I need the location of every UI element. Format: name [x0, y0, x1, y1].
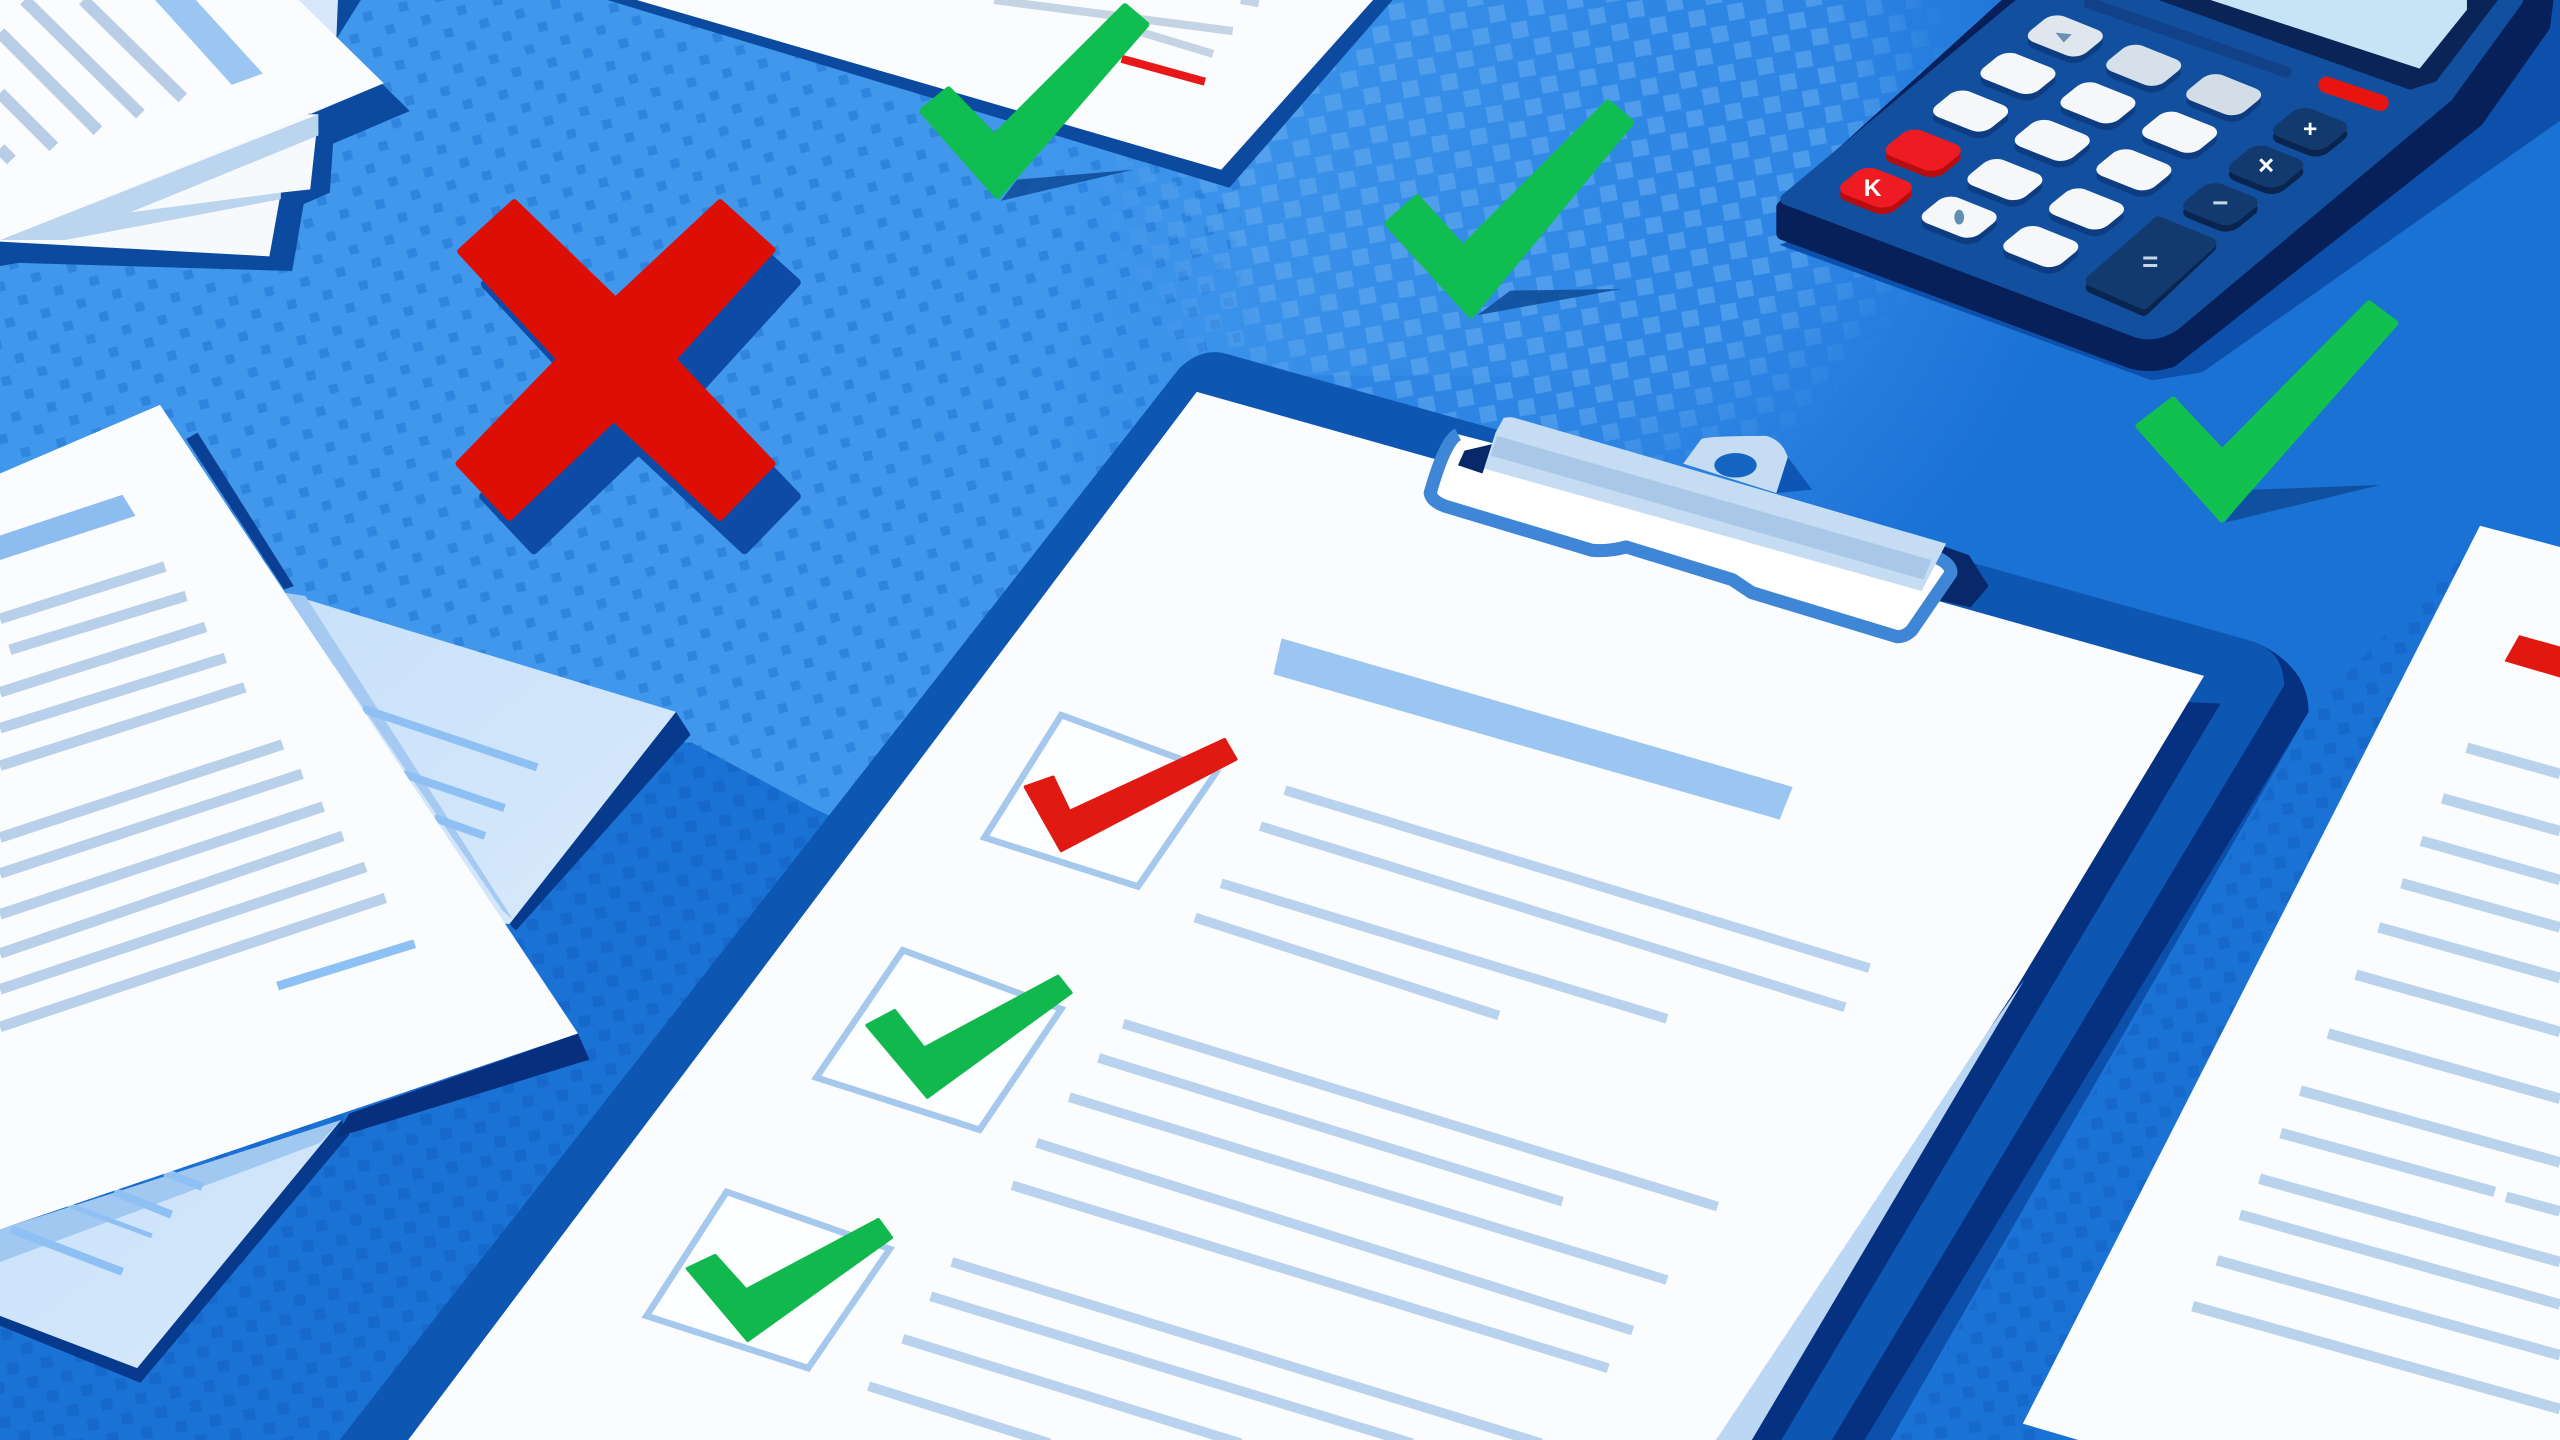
key shadows: [1916, 19, 2267, 277]
calculator: =: [2142, 246, 2158, 277]
checkbox one with red tick: [984, 715, 1236, 887]
red cross: [459, 202, 797, 550]
red line: [1122, 59, 1205, 82]
translucent band: [284, 593, 513, 919]
heading bar: [0, 495, 136, 560]
slot: [2090, 3, 2286, 72]
calculator shadow: [1780, 0, 2560, 380]
accent line: [278, 944, 415, 986]
heading bar: [155, 0, 263, 85]
paper: [408, 392, 2204, 1440]
translucent band: [0, 1120, 341, 1262]
checkbox three with green tick: [647, 1192, 891, 1368]
text lines: [0, 0, 183, 160]
clip tab: [1683, 436, 1788, 493]
clipboard back board: [340, 352, 2284, 1440]
red keys: K: [1864, 175, 1882, 202]
check mark: upper middle: [1388, 103, 1631, 315]
clip loop: [1430, 434, 1951, 637]
clip plate: [1484, 417, 1946, 591]
check mark: top centre: [922, 7, 1146, 201]
clipboard: [340, 352, 2309, 1440]
calculator: [1780, 0, 2560, 380]
document stack: top left: [0, 0, 410, 271]
paper shadow strip: [1698, 980, 2024, 1440]
text lines: [0, 567, 385, 1027]
desk shadow strip: [1832, 678, 2309, 1440]
text lines: item three: [869, 1262, 1541, 1440]
inner shadow: [1739, 702, 2220, 1440]
clip shadow: [1927, 544, 1989, 607]
display: [2158, 0, 2498, 90]
text lines: [2193, 748, 2560, 1409]
clipboard dark edge: [1812, 645, 2309, 1440]
key marks: [2056, 33, 2072, 42]
operator keys: [2091, 105, 2353, 304]
red tab: [2504, 635, 2560, 678]
calculator: ×: [2258, 150, 2274, 181]
calculator body: [1783, 0, 2547, 365]
sheet: top: [0, 0, 384, 240]
red keys: [1834, 85, 2380, 217]
document: top centre sheet: [607, 0, 1393, 188]
document: pale sheet, lower left: [0, 1120, 349, 1383]
operator key shadows: [2091, 111, 2353, 310]
light keys: [1916, 12, 2267, 270]
text lines: item two: [1012, 1024, 1718, 1368]
calculator: −: [2212, 187, 2229, 218]
document: main left sheet: [0, 405, 589, 1229]
calculator: +: [2303, 116, 2317, 143]
text lines: item one: [1195, 790, 1869, 1019]
checkbox two with green tick: [816, 950, 1071, 1130]
heading bar: [1273, 638, 1793, 820]
document: right sheet: [2023, 526, 2560, 1440]
check mark: right: [2139, 304, 2395, 522]
document: pale sheet, middle left: [186, 433, 691, 931]
